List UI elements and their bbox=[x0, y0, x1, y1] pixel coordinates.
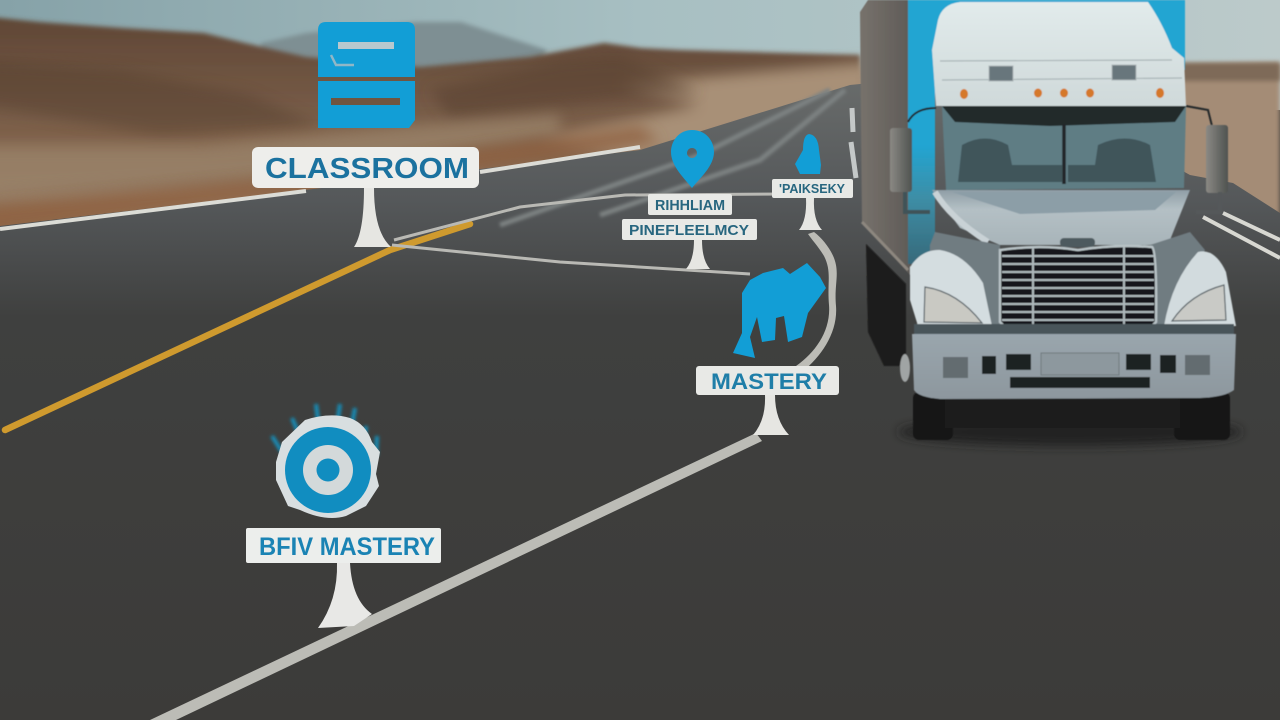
bullseye bbox=[316, 458, 340, 482]
truck: chrome lug bbox=[900, 354, 910, 382]
road: yellow centre line bbox=[5, 224, 470, 430]
truck: blue cab fairing bbox=[908, 0, 1185, 264]
outer ring bbox=[276, 415, 380, 518]
background: desert right of truck bbox=[1170, 62, 1280, 230]
road: white branch lines bbox=[392, 194, 790, 274]
truck: cab roof bbox=[932, 2, 1186, 106]
blue ring bbox=[285, 427, 371, 513]
truck: trailer underside bbox=[866, 244, 906, 366]
label plate bbox=[246, 528, 441, 563]
road: white lane line with curve bbox=[150, 232, 837, 720]
truck: roof vents bbox=[989, 65, 1136, 81]
truck: grille bbox=[1000, 246, 1156, 328]
truck: seats bbox=[958, 138, 1156, 182]
upper label plate bbox=[648, 194, 732, 215]
dune shadows bbox=[0, 60, 320, 135]
signpost: bfw mastery bbox=[246, 528, 441, 628]
truck: trailer side bbox=[860, 0, 910, 275]
truck: right fender bbox=[1164, 251, 1236, 326]
truck: left mirror bbox=[890, 108, 936, 212]
icon: classroom board bbox=[318, 22, 415, 128]
truck: front wheels and undercarriage bbox=[913, 392, 1230, 440]
lower label text: PINEFLEELMCY bbox=[629, 222, 749, 239]
road: right edge lines bbox=[1203, 213, 1280, 258]
signpost: proficiency bbox=[622, 194, 757, 269]
truck: roof trim lines bbox=[940, 60, 1182, 80]
background: distant mountain bbox=[261, 22, 547, 80]
icon: blue figure bbox=[733, 263, 826, 358]
road: far lane streaks bbox=[500, 90, 845, 225]
truck: hood bbox=[932, 190, 1190, 245]
truck: right headlight bbox=[1172, 285, 1226, 321]
tan band bbox=[0, 115, 560, 195]
upper label text: RIHHLIAM bbox=[655, 197, 725, 214]
label plate bbox=[252, 147, 479, 188]
truck: windshield bbox=[942, 106, 1186, 190]
flames bbox=[272, 404, 377, 456]
truck: bumper bbox=[912, 334, 1236, 399]
truck: bumper shadow band bbox=[914, 324, 1234, 336]
background: desert dunes bbox=[0, 16, 870, 240]
icon: location pin bbox=[671, 130, 714, 188]
label plate bbox=[696, 366, 839, 395]
truck: left fender bbox=[910, 250, 992, 326]
icon: hand bbox=[795, 134, 821, 174]
truck: windshield pillar bbox=[1062, 124, 1066, 184]
signpost: mastery bbox=[696, 366, 839, 435]
post bbox=[753, 395, 789, 435]
signpost: classroom bbox=[252, 147, 479, 247]
right sand bbox=[1170, 62, 1280, 230]
label text: 'PAIKSEKY bbox=[779, 181, 845, 196]
post bbox=[318, 563, 372, 628]
truck: ground shadow bbox=[898, 418, 1242, 446]
label text: CLASSROOM bbox=[265, 153, 469, 185]
truck bbox=[860, 0, 1242, 446]
truck: hood highlight panel bbox=[952, 192, 1176, 214]
tan plain far bbox=[540, 62, 870, 160]
post bbox=[354, 188, 391, 247]
label text: BFIV MASTERY bbox=[259, 533, 435, 561]
truck: left headlight bbox=[924, 287, 982, 323]
road: far dashes bbox=[851, 108, 856, 178]
signpost: transit bbox=[772, 179, 853, 230]
truck: trailer rail bbox=[862, 222, 908, 270]
icon: target with flames bbox=[272, 404, 380, 518]
truck: cab side panels bbox=[930, 232, 1205, 332]
truck: hood ornament bbox=[1060, 238, 1095, 247]
truck: bumper vents and plate bbox=[943, 353, 1210, 388]
orange foreground band bbox=[0, 126, 660, 232]
inner white ring bbox=[303, 445, 353, 495]
label text: MASTERY bbox=[711, 369, 827, 394]
truck: right mirror bbox=[1186, 106, 1228, 212]
truck: sun visor bbox=[942, 106, 1186, 126]
post bbox=[799, 198, 822, 230]
road: white left edge line bbox=[0, 147, 640, 229]
label plate bbox=[772, 179, 853, 198]
post bbox=[686, 240, 710, 269]
background: sky bbox=[0, 0, 1280, 110]
lower label plate bbox=[622, 219, 757, 240]
right dark ridge bbox=[1170, 63, 1280, 81]
dune mass bbox=[0, 16, 860, 240]
truck: hood left crease bbox=[935, 192, 988, 242]
truck: marker lights bbox=[960, 88, 1164, 99]
